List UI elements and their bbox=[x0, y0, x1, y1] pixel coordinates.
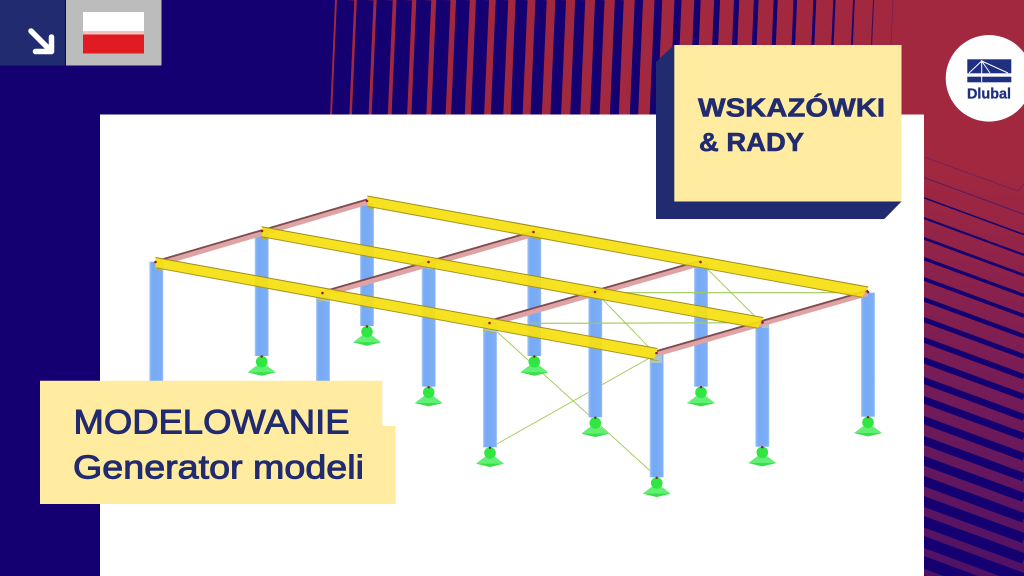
panel: white model area bbox=[100, 114, 924, 576]
columns bbox=[149, 203, 875, 477]
supports bbox=[248, 325, 882, 497]
language button: Polish flag bbox=[66, 0, 162, 66]
logo mark bbox=[967, 59, 1011, 82]
bracing behind columns bbox=[493, 265, 757, 477]
pink cross beams bbox=[160, 198, 868, 356]
heading: tips: WSKAZÓWKI bbox=[698, 93, 885, 123]
yellow main beams bbox=[156, 196, 868, 359]
joint markers bbox=[154, 200, 869, 354]
arrow button bbox=[0, 0, 65, 66]
panel: tips card bbox=[656, 45, 902, 219]
horizontal bracing bbox=[530, 293, 857, 323]
column head brackets bbox=[155, 208, 769, 363]
icon: flag bbox=[83, 12, 144, 54]
card face bbox=[674, 45, 902, 202]
structural model bbox=[149, 196, 882, 497]
heading: advice: & RADY bbox=[699, 129, 804, 157]
card shadow bbox=[656, 45, 902, 219]
heading: modelling: MODELOWANIE bbox=[74, 403, 350, 441]
logo: Dlubal bbox=[946, 35, 1024, 122]
logo wordmark: Dlubal bbox=[967, 85, 1011, 102]
panel: topic label bbox=[40, 381, 396, 504]
subheading: model generator: Generator modeli bbox=[73, 448, 364, 485]
icon: white arrow bbox=[31, 31, 52, 52]
